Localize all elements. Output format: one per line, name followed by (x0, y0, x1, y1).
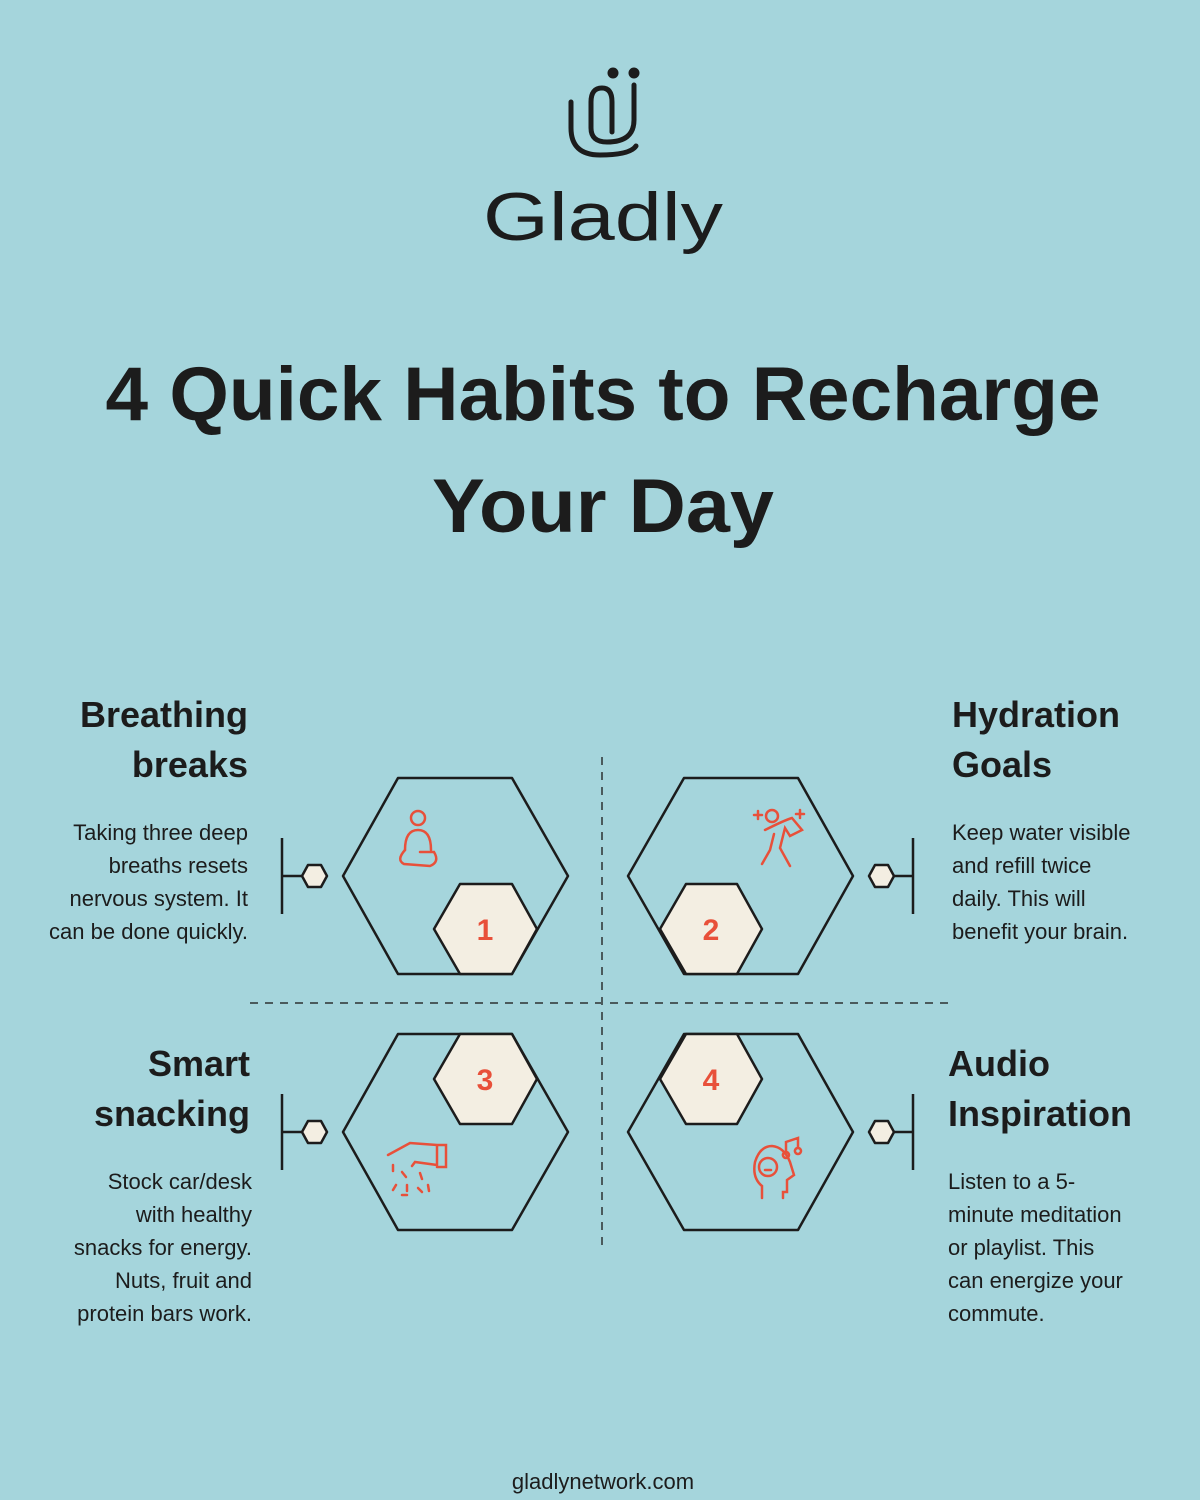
icon: music head (754, 1138, 801, 1198)
text block: hydration: Goals (952, 744, 1052, 785)
text block: snacking (74, 1043, 253, 1326)
text block: audio: can energize your (948, 1268, 1123, 1293)
text block: audio (948, 1043, 1132, 1326)
text block: snacking: with healthy (135, 1202, 252, 1227)
text block: snacking: Smart (148, 1043, 250, 1084)
text block: hydration: benefit your brain. (952, 919, 1128, 944)
footer url: gladlynetwork.com (512, 1469, 694, 1494)
panel: hexagon 3: 3 (477, 1064, 493, 1097)
text block: snacking: Nuts, fruit and (115, 1268, 252, 1293)
text block: breathing: breaths resets (109, 853, 248, 878)
text block: audio: minute meditation (948, 1202, 1122, 1227)
panel: hexagon 1: 1 (477, 914, 493, 947)
text block: breathing: nervous system. It (69, 886, 248, 911)
title: 4 Quick Habits to Recharge (106, 352, 1100, 437)
text block: breathing: breaks (132, 744, 248, 785)
icon: dancing (754, 810, 804, 866)
text block: breathing: can be done quickly. (49, 919, 248, 944)
text block: breathing: Breathing (80, 694, 248, 735)
text block: audio: Audio (948, 1043, 1050, 1084)
text block: audio: Inspiration (948, 1093, 1132, 1134)
title (106, 352, 1100, 549)
panel: hexagon 2 (628, 778, 913, 974)
text block: hydration: and refill twice (952, 853, 1091, 878)
text block: hydration (952, 694, 1131, 944)
text block: audio: or playlist. This (948, 1235, 1094, 1260)
text block: breathing (49, 694, 248, 944)
panel: hexagon 2: 2 (703, 914, 719, 947)
panel: hexagon 1 (282, 778, 568, 974)
title: Your Day (432, 464, 774, 549)
text block: breathing: Taking three deep (73, 820, 248, 845)
logo wordmark: Gladly (483, 179, 723, 255)
logo mark (571, 70, 637, 155)
icon: meditation (400, 811, 436, 866)
panel: hexagon 3 (282, 1034, 568, 1230)
text block: hydration: Keep water visible (952, 820, 1131, 845)
text block: snacking: snacks for energy. (74, 1235, 252, 1260)
icon: snack hand (388, 1143, 446, 1195)
text block: snacking: Stock car/desk (108, 1169, 253, 1194)
text block: hydration: Hydration (952, 694, 1120, 735)
text block: snacking: protein bars work. (77, 1301, 252, 1326)
panel: hexagon 4: 4 (703, 1064, 720, 1097)
text block: snacking: snacking (94, 1093, 250, 1134)
panel: hexagon 4 (628, 1034, 913, 1230)
text block: hydration: daily. This will (952, 886, 1086, 911)
text block: audio: commute. (948, 1301, 1045, 1326)
text block: audio: Listen to a 5- (948, 1169, 1075, 1194)
dashed dividers (250, 757, 948, 1252)
